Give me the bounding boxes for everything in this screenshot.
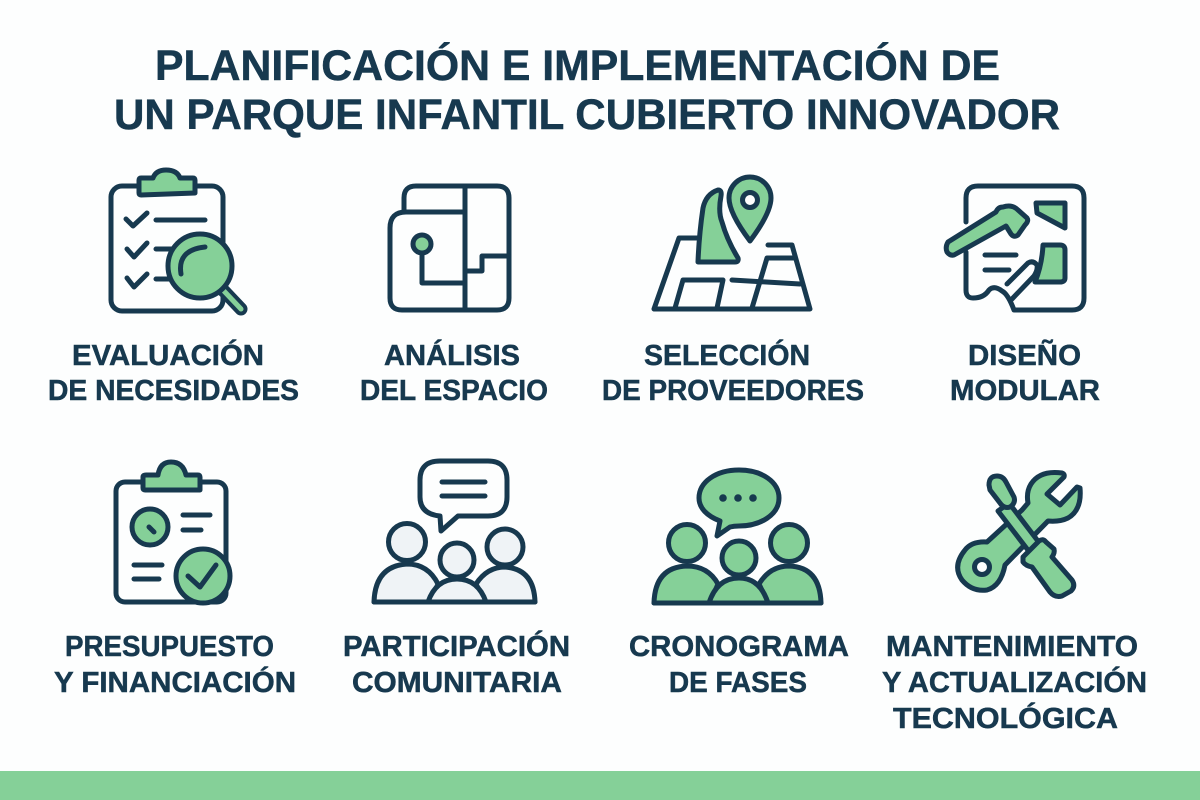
title: PLANIFICACIÓN E IMPLEMENTACIÓN DE — [155, 41, 1000, 90]
label: TECNOLÓGICA — [893, 701, 1118, 735]
label: CRONOGRAMA — [629, 631, 849, 663]
label: PRESUPUESTO — [65, 631, 274, 663]
panel: evaluación de necesidades — [48, 170, 299, 407]
icon: modular design sheet — [946, 186, 1084, 310]
icon: clipboard with magnifier — [111, 170, 241, 311]
label: COMUNITARIA — [352, 667, 562, 699]
title: UN PARQUE INFANTIL CUBIERTO INNOVADOR — [114, 91, 1060, 139]
label: DE PROVEEDORES — [602, 375, 864, 407]
footer band — [0, 771, 1200, 800]
label — [629, 631, 849, 699]
panel: mantenimiento — [882, 472, 1147, 735]
label: SELECCIÓN — [644, 338, 810, 372]
label: DE NECESIDADES — [48, 375, 299, 407]
label: DISEÑO — [968, 338, 1081, 372]
panel: selección de proveedores — [602, 177, 864, 407]
panel: cronograma de fases — [629, 470, 849, 699]
label: DE FASES — [669, 667, 807, 699]
icon: floor plan — [390, 186, 509, 310]
label — [343, 629, 570, 699]
title — [114, 41, 1060, 139]
label: DEL ESPACIO — [360, 375, 548, 407]
label — [950, 338, 1100, 407]
label — [48, 338, 299, 407]
label: ANÁLISIS — [384, 338, 520, 372]
label — [882, 631, 1147, 735]
label: Y ACTUALIZACIÓN — [882, 665, 1147, 699]
label — [360, 338, 548, 407]
icon: clipboard with check — [116, 462, 230, 603]
icon: team with speech bubble — [654, 470, 821, 603]
label — [602, 338, 864, 407]
panel: presupuesto y financiación — [54, 462, 296, 699]
label: PARTICIPACIÓN — [343, 629, 570, 663]
panel: análisis del espacio — [360, 186, 548, 407]
label: Y FINANCIACIÓN — [54, 665, 296, 699]
icon: map with pin — [654, 177, 810, 309]
label — [54, 631, 296, 699]
icon: wrench and screwdriver — [958, 472, 1080, 596]
label: MANTENIMIENTO — [886, 631, 1138, 663]
label: MODULAR — [950, 375, 1100, 407]
panel: participación comunitaria — [343, 461, 570, 699]
icon: community with speech bubble — [374, 461, 535, 602]
label: EVALUACIÓN — [72, 338, 264, 372]
panel: diseño modular — [946, 186, 1100, 407]
